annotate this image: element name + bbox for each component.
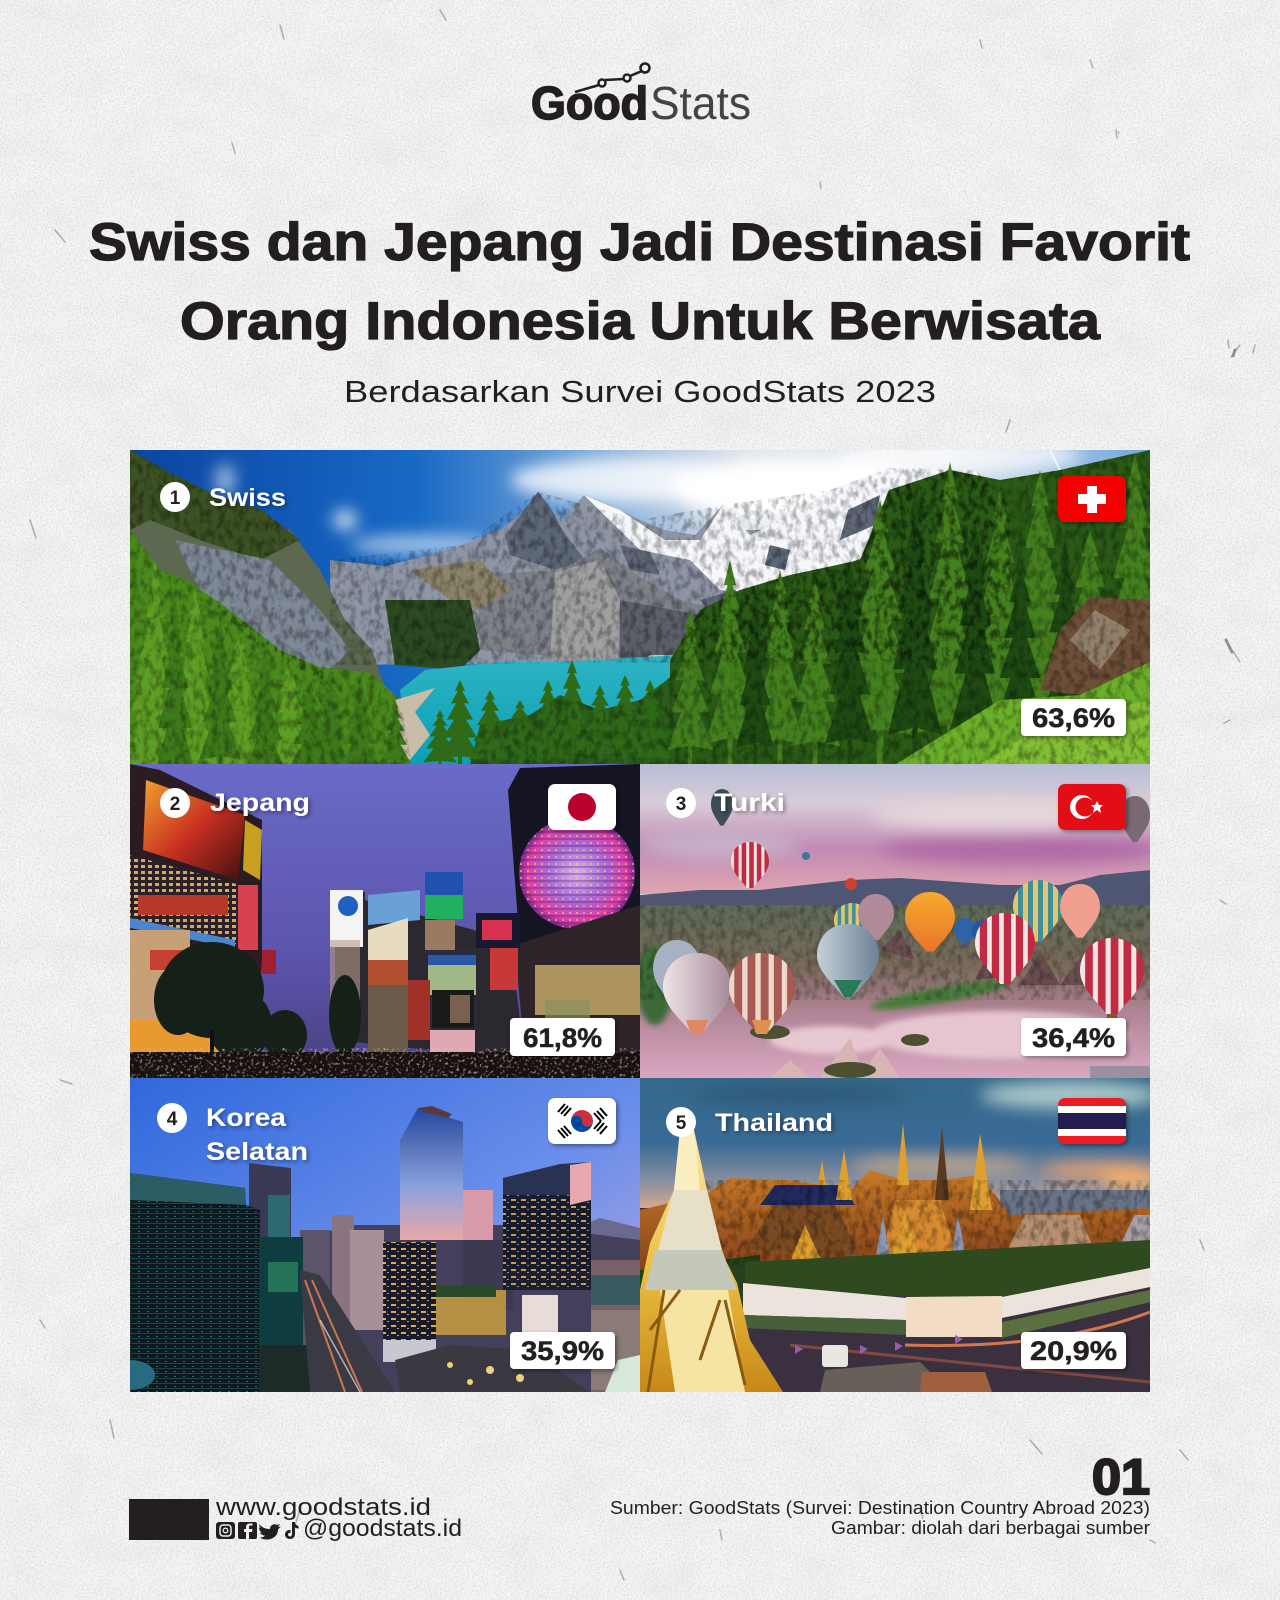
logo: GoodStats: Good — [531, 77, 648, 129]
rank badge 2 and label Jepang — [160, 788, 310, 818]
value: 63,6%: 63,6% — [1032, 703, 1115, 733]
rank badge 1 and label Swiss — [160, 482, 286, 512]
footer: website and social — [129, 1494, 462, 1542]
title — [89, 213, 1190, 351]
icons: social media — [216, 1522, 298, 1540]
rank badge 2 and label Jepang: Jepang — [210, 789, 310, 817]
panel: Thailand — [640, 1078, 1160, 1392]
rank badge 3 and label Turki — [666, 788, 785, 818]
rank badge 5 and label Thailand: 5 — [676, 1113, 687, 1134]
value: 61,8% — [510, 1018, 615, 1056]
source note: Sumber: GoodStats (Survei: Destination Country Abroad 2023) — [610, 1498, 1150, 1518]
source note — [610, 1498, 1150, 1538]
rank badge 4 and label Korea Selatan: 4 — [167, 1109, 178, 1130]
value: 36,4%: 36,4% — [1032, 1023, 1115, 1053]
subtitle: Berdasarkan Survei GoodStats 2023 — [344, 374, 936, 409]
photo: Cappadocia balloons — [637, 764, 1160, 1078]
rank badge 3 and label Turki: Turki — [714, 789, 785, 817]
balloons — [653, 789, 1150, 1034]
wat spire foreground — [640, 1112, 783, 1392]
icon: chart line nodes — [575, 64, 650, 92]
value: 61,8%: 61,8% — [523, 1023, 602, 1053]
source note: Gambar: diolah dari berbagai sumber — [831, 1518, 1150, 1538]
photo: Shibuya — [130, 764, 640, 1078]
rank badge 4 and label Korea Selatan — [157, 1103, 308, 1166]
rank badge 5 and label Thailand — [666, 1107, 833, 1137]
rank badge 1 and label Swiss: 1 — [170, 488, 181, 509]
flag: Thailand — [1058, 1098, 1126, 1144]
value: 20,9%: 20,9% — [1030, 1336, 1117, 1366]
flag: Switzerland — [1058, 476, 1126, 522]
footer: website and social: @goodstats.id — [303, 1515, 462, 1542]
rank badge 4 and label Korea Selatan: Selatan — [206, 1138, 308, 1166]
value: 35,9%: 35,9% — [521, 1336, 604, 1366]
panel: Korea Selatan — [105, 1078, 640, 1395]
value: 36,4% — [1021, 1018, 1126, 1056]
rank badge 2 and label Jepang: 2 — [170, 794, 180, 815]
value: 35,9% — [510, 1332, 615, 1369]
value: 63,6% — [1021, 699, 1126, 736]
footer: website and social: www.goodstats.id — [215, 1494, 431, 1521]
logo: GoodStats: Stats — [650, 77, 751, 129]
rank badge 4 and label Korea Selatan: Korea — [206, 1104, 287, 1132]
panel: Jepang — [130, 764, 640, 1078]
rank badge 5 and label Thailand: Thailand — [715, 1109, 833, 1137]
rank badge 1 and label Swiss: Swiss — [209, 484, 286, 512]
page number: 01 — [1092, 1449, 1150, 1505]
title: Orang Indonesia Untuk Berwisata — [180, 292, 1101, 351]
flag: South Korea — [548, 1098, 616, 1144]
logo: GoodStats — [531, 64, 751, 129]
black logo block — [129, 1499, 209, 1540]
rank badge 3 and label Turki: 3 — [676, 794, 686, 815]
photo: alpine lake — [130, 450, 1150, 764]
flag: Japan — [548, 784, 616, 830]
photo: Grand Palace — [640, 1078, 1160, 1392]
panel: Swiss — [130, 450, 1150, 764]
photo: Seoul skyline — [105, 1078, 640, 1395]
panel: Turki — [637, 764, 1160, 1078]
title: Swiss dan Jepang Jadi Destinasi Favorit — [89, 213, 1190, 272]
value: 20,9% — [1021, 1332, 1126, 1369]
flag: Turkey — [1058, 784, 1126, 830]
